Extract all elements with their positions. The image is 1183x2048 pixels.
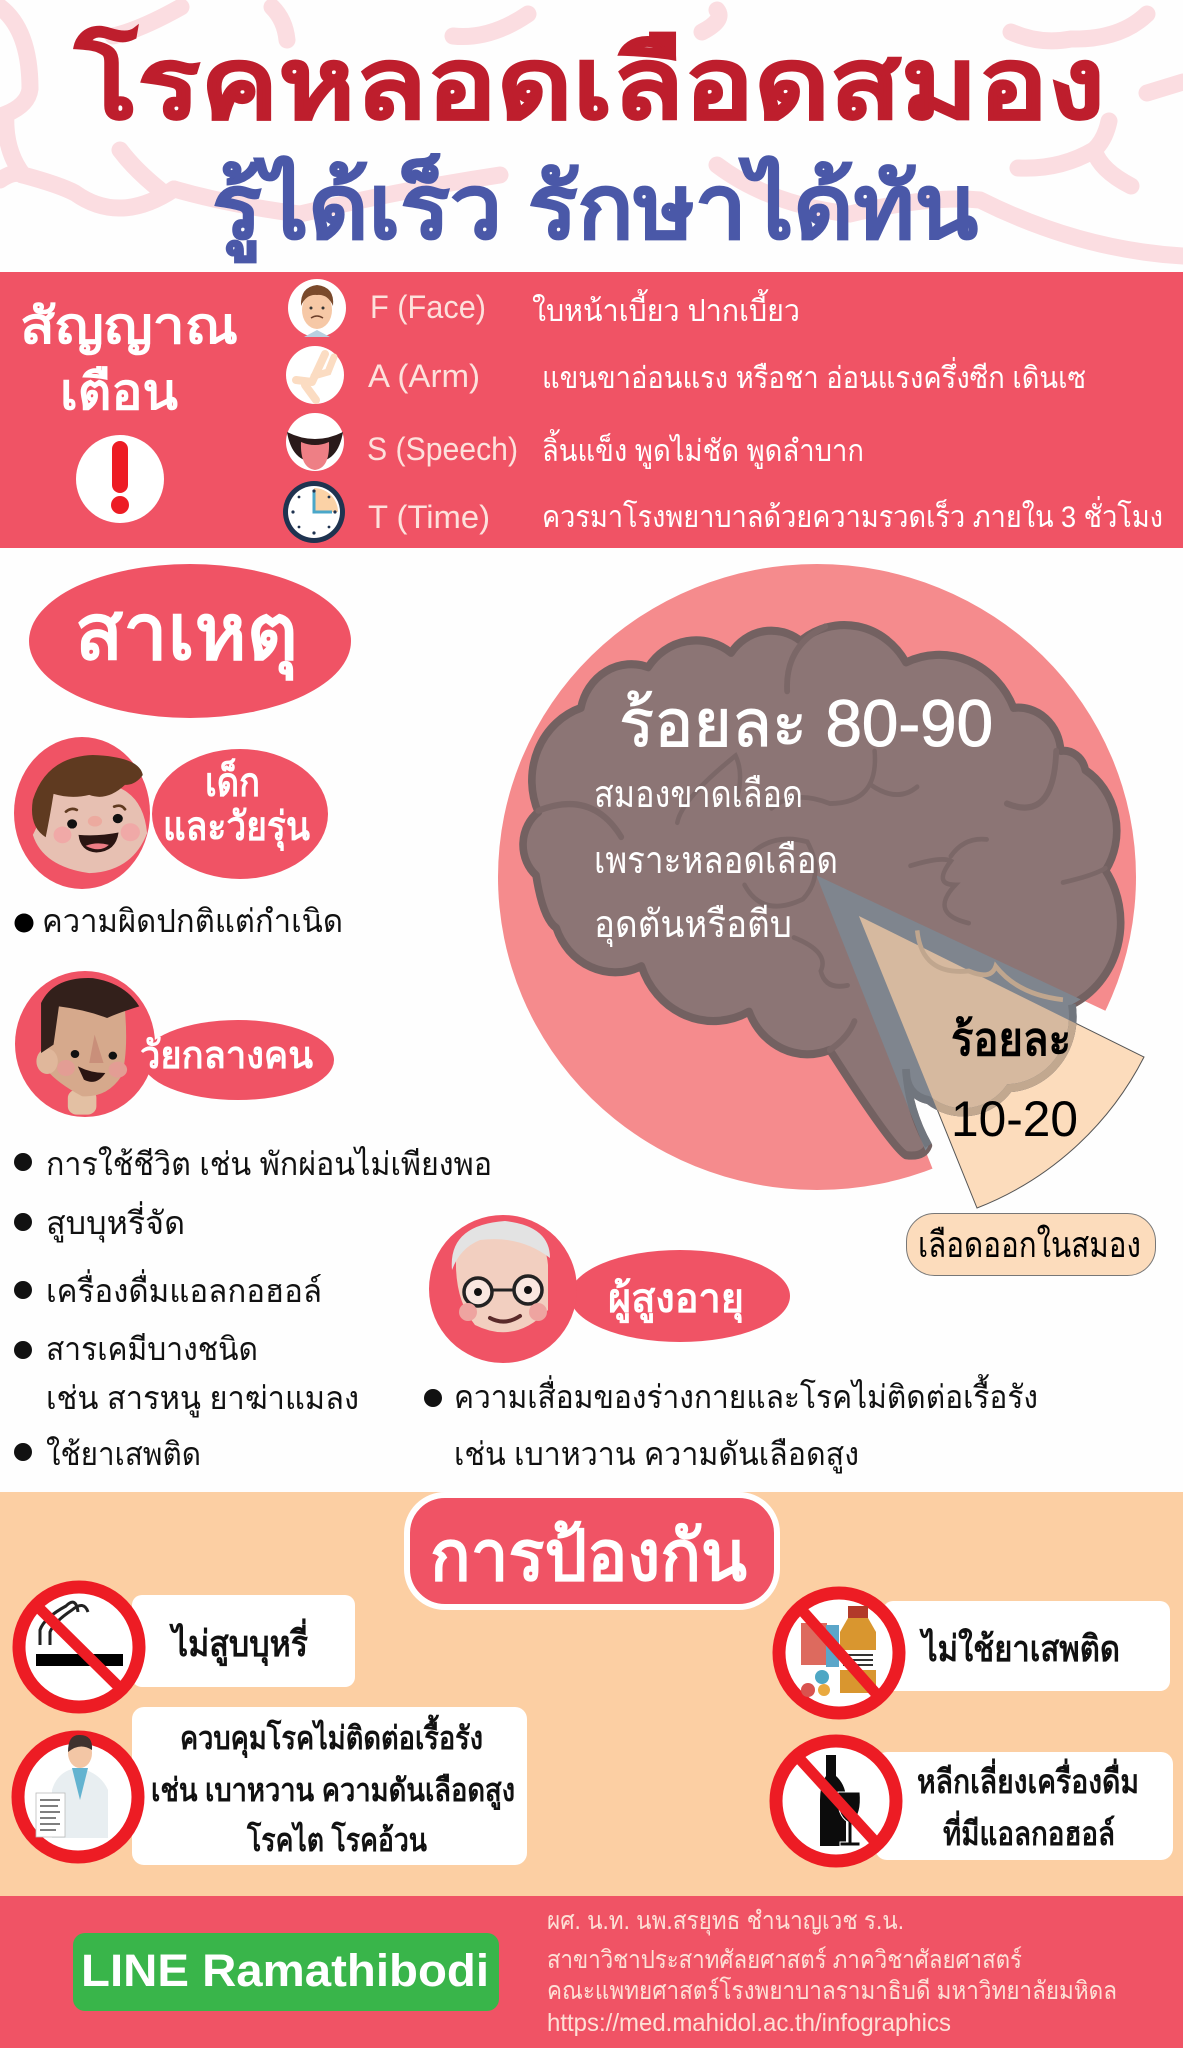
card: no smoking	[132, 1595, 355, 1687]
text: hemorrhagic percent: ร้อยละ	[951, 1013, 1071, 1065]
label: children and teens	[163, 757, 310, 852]
title: โรคหลอดเลือดสมอง	[74, 25, 1105, 140]
subtitle: รู้ได้เร็ว รักษาได้ทัน	[212, 152, 978, 263]
row S description: ลิ้นแข็ง พูดไม่ชัด พูดลำบาก	[542, 429, 864, 469]
row T label: T (Time)	[368, 499, 490, 535]
label: middle age: วัยกลางคน	[140, 1035, 313, 1077]
label: hemorrhage pill: เลือดออกในสมอง	[918, 1224, 1141, 1265]
heading: causes: สาเหตุ	[75, 588, 298, 681]
row A label: A (Arm)	[368, 358, 480, 394]
heading: prevention: การป้องกัน	[430, 1517, 747, 1595]
label: children and teens: เด็ก	[205, 757, 260, 805]
text: ischemic description: สมองขาดเลือด	[594, 774, 803, 816]
row F label: F (Face)	[370, 289, 486, 325]
icon: arm	[286, 346, 344, 404]
card: avoid alcohol: หลีกเลี่ยงเครื่องดื่ม	[917, 1758, 1139, 1800]
warning heading	[20, 298, 238, 420]
text: hemorrhagic percent	[951, 1013, 1078, 1147]
badge: LINE Ramathibodi	[73, 1933, 499, 2011]
pie: hemorrhagic slice	[859, 916, 1144, 1208]
pie: ischemic slice	[498, 564, 1136, 1190]
card: no smoking: ไม่สูบบุหรี่	[168, 1618, 309, 1667]
row A description: แขนขาอ่อนแรง หรือชา อ่อนแรงครึ่งซีก เดินเซ	[542, 357, 1086, 395]
credits: https://med.mahidol.ac.th/infographics	[547, 2009, 951, 2037]
brain illustration	[519, 621, 1124, 1160]
icon: clock	[283, 481, 345, 543]
text: ischemic description	[594, 774, 838, 947]
icon: face	[288, 279, 346, 337]
icon: adult face and label	[15, 971, 334, 1117]
bullet list: adults: สูบบุหรี่จัด	[46, 1201, 185, 1243]
card: control chronic disease	[132, 1707, 527, 1865]
bullet list: elderly: เช่น เบาหวาน ความดันเลือดสูง	[454, 1436, 859, 1474]
bullet list: adults	[14, 1146, 492, 1472]
bullet list: adults: เครื่องดื่มแอลกอฮอล์	[46, 1269, 322, 1309]
card: control chronic disease: โรคไต โรคอ้วน	[246, 1821, 427, 1858]
bullet list: elderly: ความเสื่อมของร่างกายและโรคไม่ติดต่อเรื้อรัง	[454, 1374, 1038, 1415]
row S label: S (Speech)	[367, 431, 518, 467]
bullet list: adults: สารเคมีบางชนิด	[46, 1331, 258, 1367]
label: hemorrhage pill	[906, 1214, 1156, 1276]
bullet list: adults: ใช้ยาเสพติด	[46, 1436, 201, 1472]
warning heading: สัญญาณ	[20, 298, 238, 355]
background: blood vessels	[0, 7, 1183, 256]
icon: elderly face and label	[429, 1215, 790, 1363]
chart: stroke type pie over brain	[498, 564, 1156, 1276]
bullet list: children: ความผิดปกติแต่กำเนิด	[42, 903, 343, 939]
credits	[547, 1907, 1117, 2037]
bullet list: adults: เช่น สารหนู ยาฆ่าแมลง	[46, 1380, 359, 1418]
heading: prevention	[407, 1495, 777, 1607]
bullet list: adults: การใช้ชีวิต เช่น พักผ่อนไม่เพียงพอ	[46, 1146, 492, 1182]
icon: no alcohol sign	[776, 1741, 896, 1861]
panel: prevention	[0, 1492, 1183, 1896]
heading: causes	[29, 564, 351, 718]
icon: child face and label	[14, 737, 328, 889]
card: no drugs: ไม่ใช้ยาเสพติด	[919, 1627, 1120, 1669]
label: children and teens: และวัยรุ่น	[163, 805, 310, 852]
icon: no smoking sign	[19, 1587, 139, 1707]
credits: สาขาวิชาประสาทศัลยศาสตร์ ภาควิชาศัลยศาสตร์	[547, 1946, 1022, 1974]
bullet list: elderly	[424, 1374, 1038, 1474]
icon: exclamation mark	[76, 435, 164, 523]
icon: tongue	[286, 413, 344, 471]
badge: LINE Ramathibodi: LINE Ramathibodi	[81, 1945, 489, 1996]
warning heading: เตือน	[60, 364, 178, 420]
card: control chronic disease: เช่น เบาหวาน ความดันเลือดสูง	[151, 1772, 515, 1811]
icon: no drugs sign	[779, 1593, 899, 1713]
row F description: ใบหน้าเบี้ยว ปากเบี้ยว	[532, 289, 800, 328]
panel: footer	[0, 1896, 1183, 2048]
text: hemorrhagic percent: 10-20	[951, 1091, 1078, 1147]
card: avoid alcohol: ที่มีแอลกอฮอล์	[943, 1810, 1115, 1852]
card: control chronic disease: ควบคุมโรคไม่ติดต่อเรื้อรัง	[180, 1714, 483, 1759]
text: ischemic description: เพราะหลอดเลือด	[594, 840, 838, 882]
text: ischemic percent: ร้อยละ 80-90	[619, 686, 993, 760]
icon: doctor prohibition sign	[18, 1735, 138, 1857]
label: elderly: ผู้สูงอายุ	[608, 1277, 744, 1324]
credits: คณะแพทยศาสตร์โรงพยาบาลรามาธิบดี มหาวิทยาลัยมหิดล	[547, 1976, 1117, 2005]
text: ischemic description: อุดตันหรือตีบ	[594, 904, 792, 947]
panel: warning signs	[0, 272, 1183, 548]
credits: ผศ. น.ท. นพ.สรยุทธ ชำนาญเวช ร.น.	[547, 1907, 904, 1936]
card: avoid alcohol	[875, 1752, 1173, 1860]
card: no drugs	[883, 1601, 1170, 1691]
